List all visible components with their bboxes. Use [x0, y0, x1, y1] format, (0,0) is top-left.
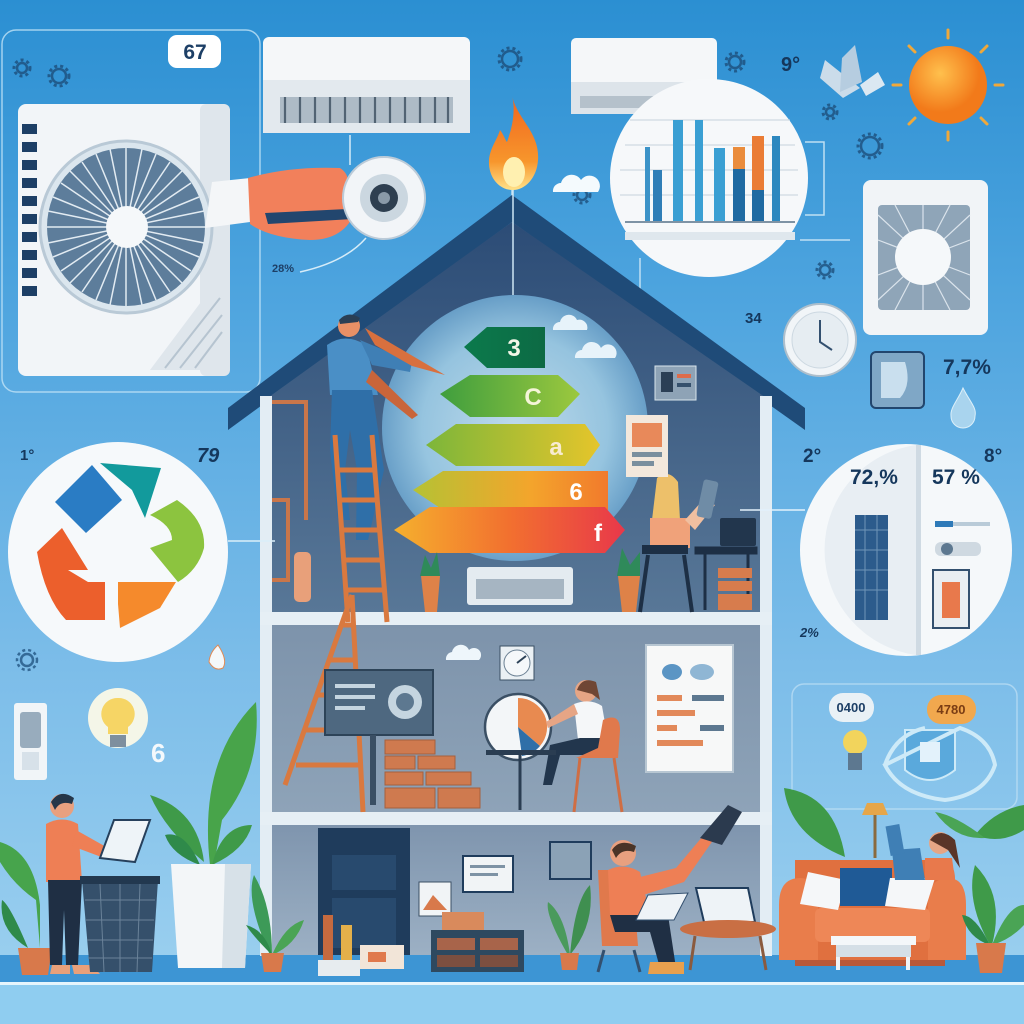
woman at laptop desk	[640, 474, 756, 612]
large plant in white pot	[150, 702, 257, 968]
wall frames	[419, 842, 591, 916]
side labels right: 2°	[803, 446, 821, 467]
man at tablet	[46, 794, 150, 974]
panel: top left outline	[2, 30, 260, 392]
cloud and gauge	[446, 645, 534, 680]
door	[318, 828, 410, 955]
coffee table with laptop	[680, 888, 776, 970]
recycle circle panel	[8, 442, 228, 662]
badge: 0400	[829, 693, 874, 722]
potted plants in attic room	[420, 548, 640, 612]
small plant in bottom room	[548, 885, 591, 970]
outdoor AC unit	[18, 104, 230, 376]
wall data poster	[646, 645, 733, 772]
flame	[489, 95, 538, 190]
seated woman at desk	[486, 680, 622, 812]
badge: 0400: 0400	[837, 700, 865, 715]
waste basket	[80, 876, 160, 972]
man with laptop	[598, 805, 742, 974]
connector recycle to pipes	[228, 540, 275, 542]
ladder	[285, 435, 387, 812]
stacked bricks upper	[718, 568, 752, 610]
candles and box	[318, 915, 404, 976]
bottom room	[272, 825, 760, 955]
house	[228, 195, 805, 956]
left small plant	[0, 842, 52, 975]
floor lamp	[862, 803, 888, 858]
side labels right: 8°	[984, 446, 1002, 467]
brick stack	[385, 740, 480, 808]
label: 9°: 9°	[781, 54, 800, 76]
panel: bottom right outline	[792, 684, 1017, 809]
cloud left of roof	[553, 175, 600, 192]
recycle arrow: green	[150, 500, 204, 582]
side labels right: 2%	[799, 625, 819, 640]
connector right circle	[740, 509, 805, 511]
badge: 4780: 4780	[937, 702, 965, 717]
connectors right	[512, 142, 850, 380]
energy rating bars: a	[549, 434, 563, 461]
wall vent unit	[863, 180, 988, 335]
chart circle panel	[610, 79, 808, 277]
indoor AC unit right	[571, 38, 717, 114]
label: 7.7%: 7,7%	[943, 356, 991, 379]
side labels right	[799, 446, 1002, 640]
thermostat panel	[655, 366, 696, 400]
couple on sofa	[886, 824, 960, 880]
small plant at house left	[246, 875, 304, 972]
indoor AC unit left	[263, 37, 470, 133]
switch device	[14, 703, 47, 780]
small device	[871, 352, 924, 408]
swirling shield icon	[885, 728, 995, 800]
icon: snowflake	[820, 45, 885, 98]
right plant	[935, 805, 1024, 973]
side labels left: 1°	[20, 447, 34, 464]
low cabinet	[431, 912, 524, 972]
label: 6: 6	[151, 738, 165, 768]
connector line	[300, 135, 366, 272]
small icon left	[17, 650, 37, 670]
energy rating bars: 3	[507, 335, 521, 362]
extinguisher bottle	[294, 552, 311, 602]
water drop	[951, 388, 975, 428]
energy glow circle	[382, 295, 648, 561]
energy rating bars: 6	[569, 479, 583, 506]
clock pie chart	[485, 694, 551, 760]
ground strip	[0, 955, 1024, 1024]
bulb small	[843, 730, 867, 770]
wall AC in room	[467, 567, 573, 605]
energy rating bars: f	[594, 520, 603, 547]
white coffee table	[831, 936, 916, 970]
recycle arrow: red	[37, 528, 105, 620]
right circle panel: 72,%	[850, 466, 898, 489]
badge: 67	[168, 35, 221, 68]
middle room control panel	[325, 670, 433, 805]
right large leaf	[784, 788, 845, 857]
recycle arrow: blue	[55, 465, 122, 533]
label: 34: 34	[745, 310, 762, 327]
dial control	[343, 157, 425, 239]
vertical line from flame	[512, 190, 514, 295]
clouds in room	[553, 315, 617, 358]
recycle arrow: orange	[118, 582, 176, 628]
roof	[228, 195, 805, 430]
right circle panel: 57 %	[932, 466, 980, 489]
energy rating bars: C	[524, 384, 542, 411]
side labels left	[20, 445, 220, 467]
small gears and icons top	[14, 48, 882, 278]
light bulb	[88, 688, 148, 748]
copper pipes	[272, 402, 306, 580]
worker on ladder	[327, 314, 445, 540]
icon: sun	[893, 30, 1003, 140]
hand with tool	[205, 168, 370, 240]
wall poster	[626, 415, 668, 477]
clock	[784, 304, 856, 376]
recycle arrow: teal	[100, 463, 161, 518]
right circle panel	[800, 444, 1012, 656]
droplet icon left	[209, 645, 225, 669]
floor slabs	[260, 612, 772, 825]
label: 28%: 28%	[272, 263, 294, 275]
middle room	[272, 624, 760, 812]
badge: 4780	[927, 695, 976, 724]
top room	[262, 222, 772, 612]
side labels left: 79	[197, 445, 220, 467]
side walls	[260, 396, 772, 956]
sofa	[779, 860, 966, 966]
energy rating bars	[394, 327, 625, 553]
badge: 67: 67	[183, 41, 207, 64]
